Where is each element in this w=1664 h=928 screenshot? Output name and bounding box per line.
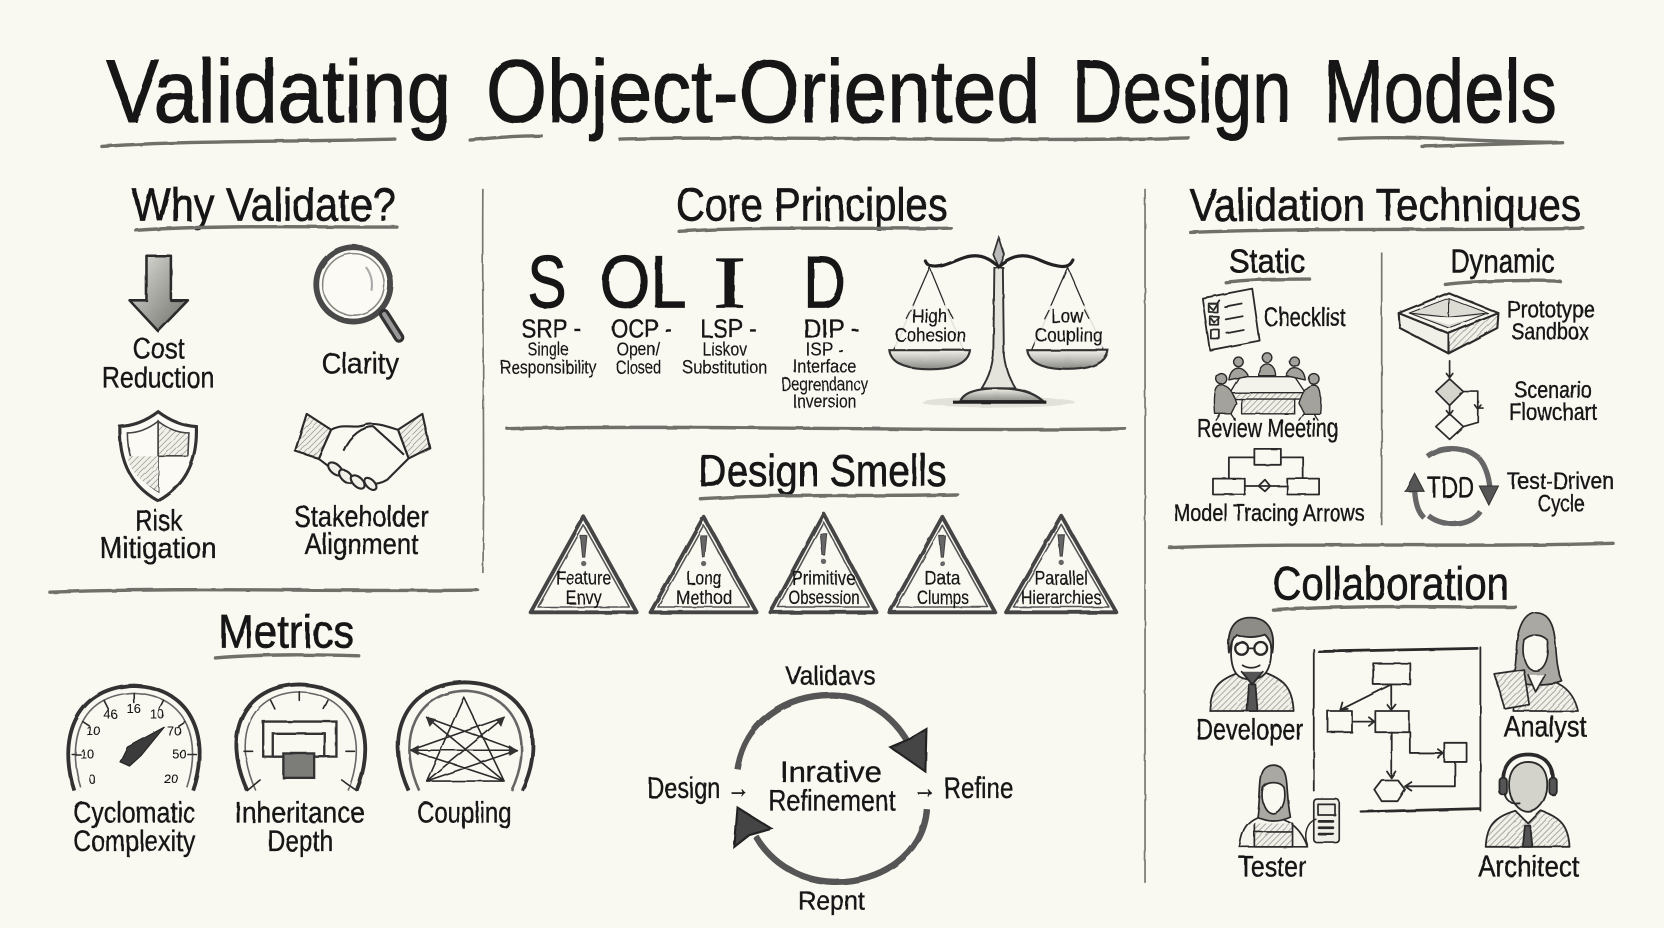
panel: design smells <box>531 447 1116 612</box>
label: tester: Tester <box>1238 851 1306 884</box>
label: low coupling: Low <box>1051 306 1084 328</box>
heading: validation techniques: Validation Techniques <box>1190 180 1581 231</box>
principle: DIP: Inversion <box>793 390 856 411</box>
label: cyclomatic complexity: Complexity <box>73 825 195 858</box>
icon: down arrow <box>130 256 188 331</box>
warning: feature envy: Feature <box>556 568 611 590</box>
heading: design smells: Design Smells <box>698 447 947 496</box>
label: iterative refinement <box>768 756 896 818</box>
warning: feature envy <box>531 517 637 612</box>
warning: primitive obsession: Primitive <box>792 568 855 590</box>
warning: feature envy: Envy <box>566 587 602 609</box>
label: prototype sandbox: Prototype <box>1507 296 1595 323</box>
warning: parallel hierarchies <box>1006 516 1116 612</box>
icon: TDD cycle: TDD <box>1427 472 1474 505</box>
principle: OCP: Closed <box>616 357 661 378</box>
title: Design <box>1072 41 1291 141</box>
principle: LSP <box>682 315 767 378</box>
principle: LSP: LSP - <box>700 315 757 343</box>
title: Models <box>1323 41 1557 141</box>
icon: TDD cycle <box>1405 449 1498 524</box>
label: risk mitigation: Risk <box>135 505 183 538</box>
label: risk mitigation <box>100 505 217 565</box>
panel: iterative refinement cycle <box>647 662 1013 915</box>
icon: review meeting <box>1214 353 1321 420</box>
label: checklist: Checklist <box>1264 304 1346 332</box>
label: cost reduction: Cost <box>133 333 185 366</box>
label: validate: Validavs <box>785 662 876 690</box>
solid letters <box>527 241 846 325</box>
warning: long method <box>651 517 757 612</box>
label: architect: Architect <box>1478 851 1580 884</box>
panel: metrics <box>68 605 533 858</box>
warning: primitive obsession <box>770 514 877 612</box>
gauge: cyclomatic complexity: 10 <box>80 747 94 762</box>
principle: DIP: Interface <box>793 355 856 376</box>
panel: why validate <box>100 179 430 565</box>
warning: long method: Long <box>687 568 722 590</box>
panel: validation techniques <box>1174 180 1614 527</box>
principle: LSP: Substitution <box>682 357 767 378</box>
heading: core principles: Core Principles <box>676 179 948 231</box>
person: tester <box>1239 765 1339 847</box>
panel: core principles <box>500 179 1108 411</box>
label: test-driven cycle: Test-Driven <box>1507 468 1614 495</box>
heading: metrics: Metrics <box>219 605 354 657</box>
diagram: model board <box>1314 647 1480 812</box>
arrow: upper cycle <box>738 695 926 771</box>
label: test-driven cycle: Cycle <box>1538 490 1584 517</box>
icon: model tracing arrows <box>1213 449 1319 495</box>
principle: OCP: Open/ <box>617 338 661 359</box>
gauge: cyclomatic complexity: 70 <box>167 723 181 738</box>
icon: shield <box>120 412 196 501</box>
label: developer: Developer <box>1196 714 1303 747</box>
label: low coupling: Coupling <box>1035 325 1103 347</box>
label: review meeting: Review Meeting <box>1197 415 1338 443</box>
gauge: cyclomatic complexity: 46 <box>103 706 117 721</box>
heading: dynamic: Dynamic <box>1451 243 1555 280</box>
title: Validating <box>106 41 451 141</box>
person: analyst <box>1494 612 1578 711</box>
arrow: lower cycle <box>734 808 926 882</box>
label: scenario flowchart <box>1509 377 1597 426</box>
label: coupling: Coupling <box>417 796 512 829</box>
label: cyclomatic complexity <box>73 796 195 858</box>
principle: DIP: Degrendancy <box>781 374 869 395</box>
person: architect <box>1486 754 1570 847</box>
label: scenario flowchart: Scenario <box>1514 377 1592 404</box>
principle: DIP: DIP - <box>803 315 860 343</box>
label: stakeholder alignment <box>294 500 429 561</box>
person: developer <box>1210 618 1294 711</box>
principle: LSP: Liskov <box>703 338 748 359</box>
gauge: cyclomatic complexity: 16 <box>127 701 141 716</box>
warning: parallel hierarchies: Parallel <box>1035 568 1088 590</box>
principle: OCP <box>611 315 672 378</box>
icon: scenario flowchart <box>1436 361 1484 439</box>
label: refine: → Refine <box>913 772 1013 805</box>
label: high cohesion: Cohesion <box>895 325 966 347</box>
label: high cohesion <box>895 306 966 347</box>
warning: data clumps: Clumps <box>917 587 969 609</box>
label: test-driven cycle <box>1507 468 1614 517</box>
title <box>102 41 1562 146</box>
principle: SRP: SRP - <box>521 315 582 343</box>
principle: DIP <box>781 315 869 411</box>
label: inheritance depth: Depth <box>267 825 333 858</box>
label: cyclomatic complexity: Cyclomatic <box>73 796 195 829</box>
label: inheritance depth: Inheritance <box>235 796 365 829</box>
solid letters: I <box>713 243 746 325</box>
label: clarity: Clarity <box>322 348 399 381</box>
principle: DIP: ISP - <box>805 338 844 359</box>
label: repeat: Repnt <box>798 887 865 915</box>
gauge: cyclomatic complexity: 10 <box>150 706 164 721</box>
gauge: cyclomatic complexity <box>68 686 200 791</box>
label: cost reduction: Reduction <box>102 361 214 394</box>
label: analyst: Analyst <box>1504 710 1587 743</box>
label: high cohesion: High <box>912 306 948 328</box>
warning: data clumps: Data <box>924 568 960 590</box>
label: cost reduction <box>102 333 214 394</box>
solid letters: S <box>527 241 567 324</box>
warning: primitive obsession: Obsession <box>788 587 860 609</box>
heading: collaboration: Collaboration <box>1272 558 1509 610</box>
warning: parallel hierarchies: Hierarchies <box>1021 587 1102 609</box>
label: prototype sandbox: Sandbox <box>1511 319 1589 346</box>
gauge: cyclomatic complexity: 50 <box>172 747 186 762</box>
label: inheritance depth <box>235 796 365 858</box>
label: prototype sandbox <box>1507 296 1595 346</box>
label: iterative refinement: Inrative <box>780 756 882 789</box>
gauge: cyclomatic complexity: 0 <box>89 772 96 787</box>
heading: why validate: Why Validate? <box>132 179 396 231</box>
label: stakeholder alignment: Alignment <box>305 528 419 561</box>
principle: SRP <box>500 315 597 378</box>
icon: checklist <box>1202 289 1260 350</box>
panel: collaboration <box>1196 558 1587 884</box>
gauge: inheritance depth <box>236 684 365 791</box>
gauge: cyclomatic complexity: 10 <box>86 723 100 738</box>
icon: prototype sandbox <box>1399 293 1498 353</box>
label: design: Design → <box>647 772 750 805</box>
icon: balance scale <box>889 238 1108 407</box>
heading: static: Static <box>1229 243 1305 280</box>
label: iterative refinement: Refinement <box>768 785 896 818</box>
icon: handshake <box>295 414 430 492</box>
principle: OCP: OCP - <box>611 315 672 343</box>
solid letters: OL <box>600 241 687 324</box>
title: Object-Oriented <box>486 41 1040 141</box>
label: stakeholder alignment: Stakeholder <box>294 500 429 533</box>
principle: SRP: Responsibility <box>500 357 597 378</box>
warning: long method: Method <box>676 587 732 609</box>
gauge: cyclomatic complexity: 20 <box>164 771 178 786</box>
principle: SRP: Single <box>527 338 569 359</box>
label: risk mitigation: Mitigation <box>100 532 217 565</box>
icon: magnifying glass <box>316 247 399 337</box>
solid letters: D <box>803 241 846 324</box>
label: low coupling <box>1035 306 1103 347</box>
label: scenario flowchart: Flowchart <box>1509 399 1597 426</box>
gauge: coupling <box>398 682 533 791</box>
label: model tracing arrows: Model Tracing Arrows <box>1174 500 1365 527</box>
warning: data clumps <box>889 517 995 612</box>
